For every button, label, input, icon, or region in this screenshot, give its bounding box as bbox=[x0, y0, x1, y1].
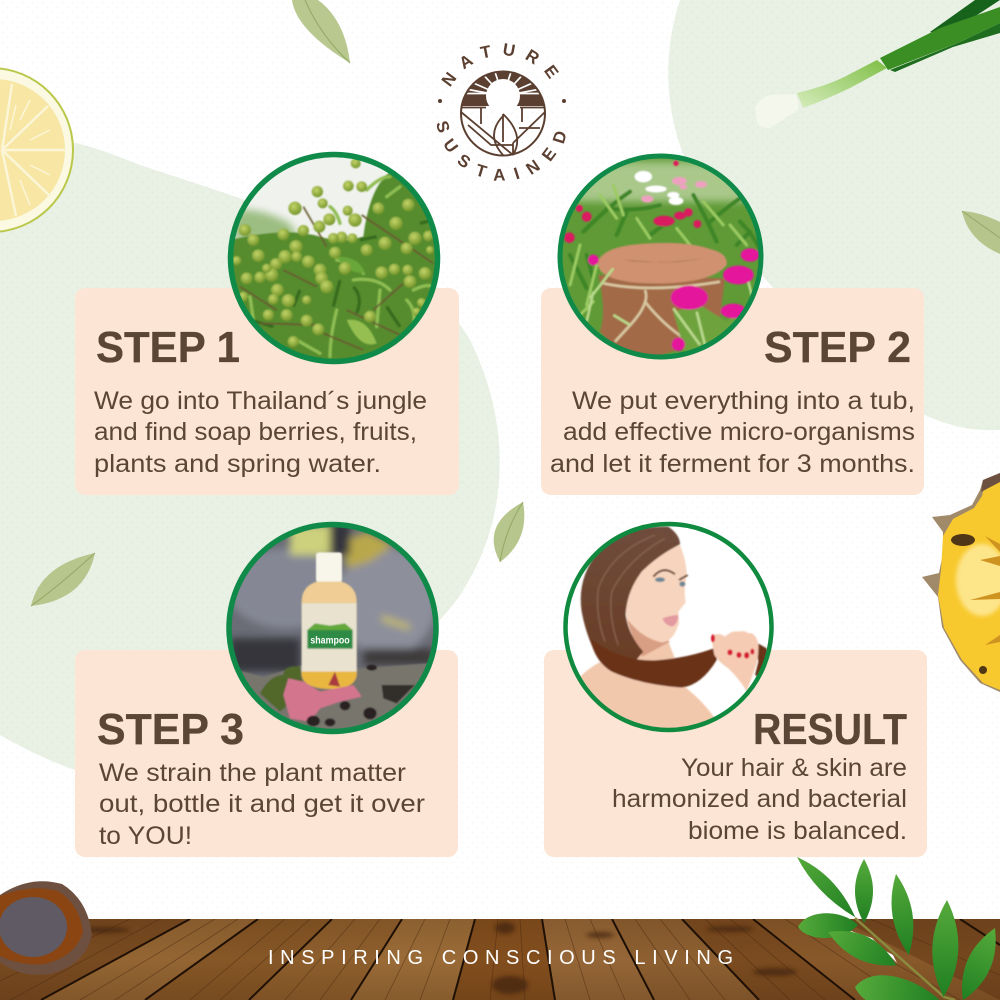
photo ring bbox=[566, 524, 772, 730]
photo ring bbox=[560, 156, 761, 357]
logo text: nature: NATURE bbox=[441, 43, 559, 87]
photo ring bbox=[229, 524, 436, 732]
icon: spring onion bbox=[755, 0, 1000, 128]
text: step 3 body bbox=[99, 759, 425, 850]
text: step 2 body bbox=[550, 387, 915, 478]
heading: step 3: STEP 3 bbox=[97, 705, 244, 754]
logo ring bbox=[461, 72, 545, 156]
icon: pineapple bbox=[922, 473, 1000, 692]
photo: shampoo bottle: shampoo bbox=[310, 636, 350, 647]
text: step 1 body: plants and spring water. bbox=[94, 450, 381, 478]
photo: fermenting pot bbox=[558, 154, 764, 360]
photo: shampoo bottle bbox=[227, 522, 440, 735]
text: step 2 body: add effective micro-organisms bbox=[563, 418, 915, 446]
photo: soap berries bbox=[227, 152, 447, 370]
icon: leaf top bbox=[292, 0, 350, 63]
logo sun and rays bbox=[462, 72, 544, 113]
photo: woman with healthy hair bbox=[563, 522, 775, 735]
text: step 1 body: and find soap berries, fruits, bbox=[94, 418, 417, 446]
text: step 1 body bbox=[94, 387, 427, 478]
text: step 2 body: and let it ferment for 3 months. bbox=[550, 450, 915, 478]
green blob left bbox=[0, 139, 500, 770]
icon: olive branch bbox=[793, 851, 1000, 1000]
wood floor bbox=[0, 919, 1000, 1000]
icon: soapberry seed bbox=[0, 881, 92, 975]
text: step 2 body: We put everything into a tub, bbox=[572, 387, 915, 415]
panel: result bbox=[544, 650, 927, 857]
text: step 3 body: out, bottle it and get it over bbox=[99, 790, 425, 818]
photo ring bbox=[230, 154, 438, 362]
green blob right bbox=[668, 0, 1000, 430]
icon: lemon bbox=[0, 67, 74, 233]
logo text: sustained: SUSTAINED bbox=[436, 121, 566, 181]
panel: step 1 bbox=[75, 288, 459, 495]
text: step 3 body: to YOU! bbox=[99, 822, 192, 850]
icon: leaf right bbox=[962, 211, 1000, 254]
text: result body: Your hair & skin are bbox=[681, 754, 907, 782]
heading: result: RESULT bbox=[753, 705, 907, 754]
heading: step 2: STEP 2 bbox=[764, 323, 911, 372]
logo bbox=[436, 43, 566, 181]
text: result body: biome is balanced. bbox=[688, 817, 907, 845]
tagline: INSPIRING CONSCIOUS LIVING bbox=[268, 947, 733, 969]
icon: leaf left bbox=[31, 553, 95, 606]
text: result body: harmonized and bacterial bbox=[612, 785, 907, 813]
logo leaves bbox=[461, 108, 545, 155]
panel: step 3 bbox=[75, 650, 458, 857]
text: step 1 body: We go into Thailand´s jungle bbox=[94, 387, 427, 415]
text: step 3 body: We strain the plant matter bbox=[99, 759, 406, 787]
icon: leaf centre bbox=[494, 502, 524, 562]
text: result body bbox=[612, 754, 907, 845]
panel: step 2 bbox=[541, 288, 924, 495]
heading: step 1: STEP 1 bbox=[96, 323, 240, 372]
